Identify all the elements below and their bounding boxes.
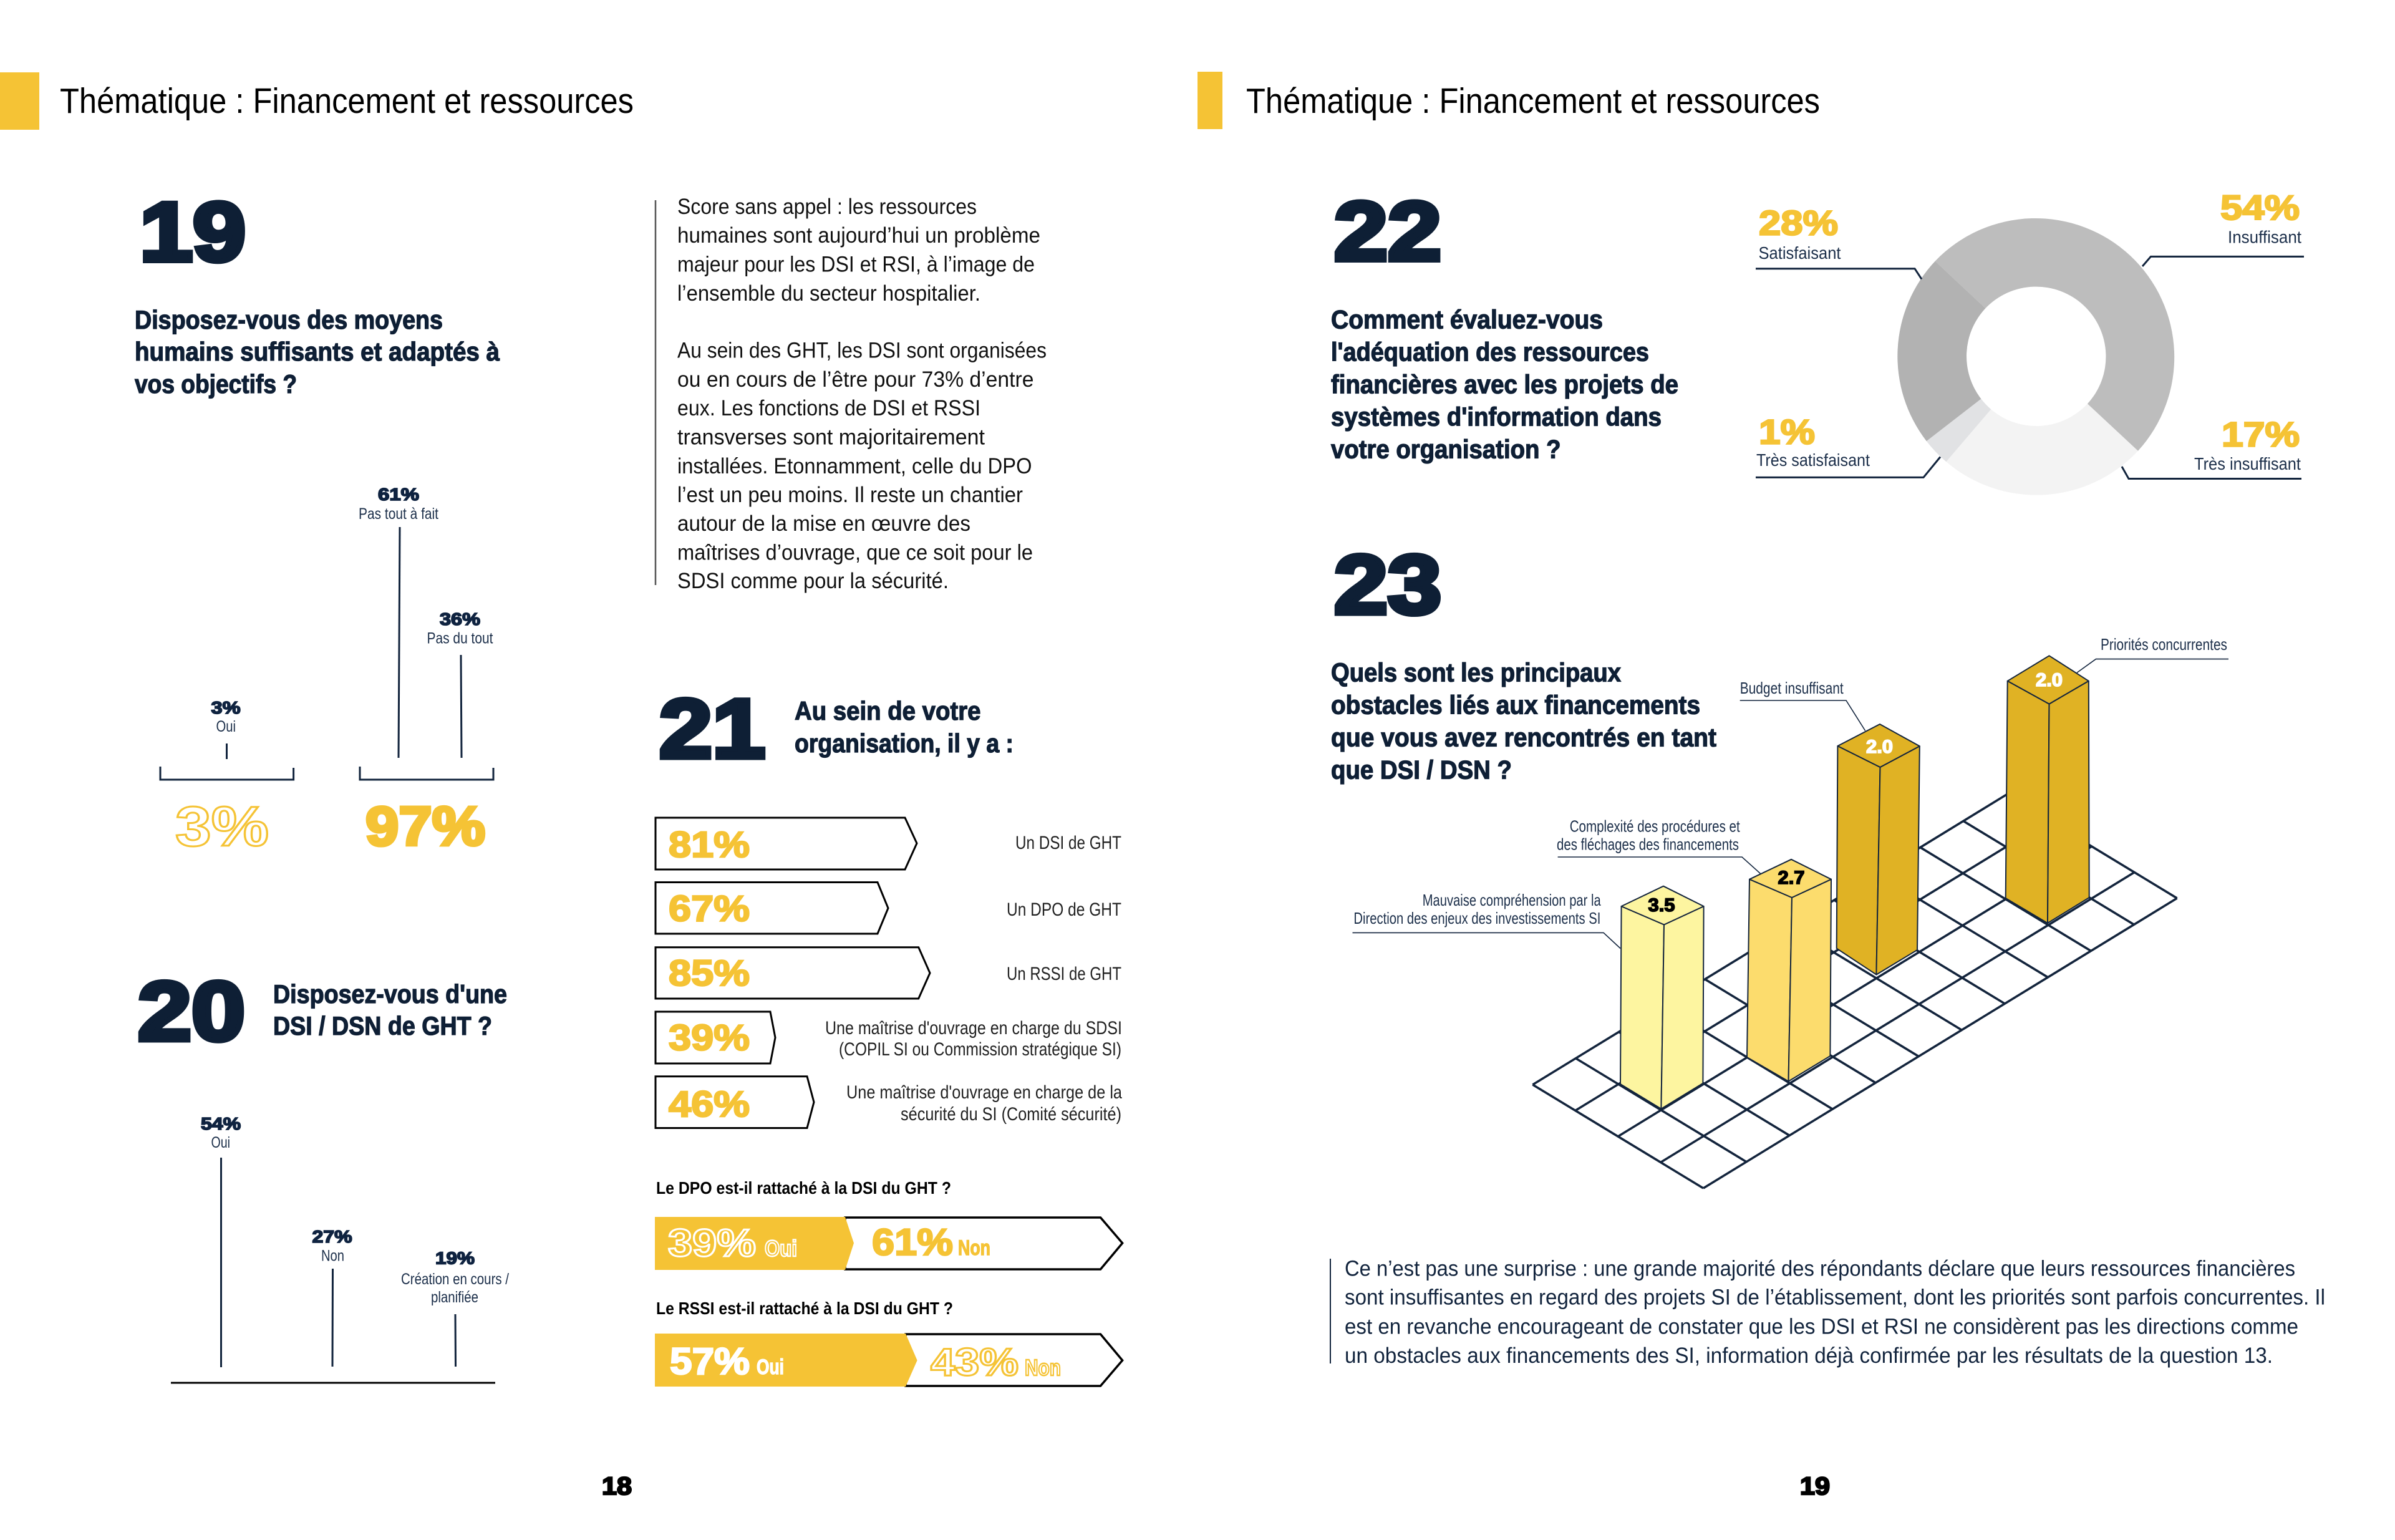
panel: question 19 (135, 186, 500, 858)
text block: commentary: installées. Etonnamment, celle du DPO (677, 454, 1032, 478)
question 21 heading: Au sein de votre (795, 696, 980, 725)
value: 3% oui: Oui (216, 718, 236, 735)
icon: yellow header tab (1198, 72, 1222, 129)
arrow row: 85% RSSI: 85% (669, 953, 750, 994)
callout: 17% très insuffisant (2122, 415, 2301, 479)
text block: commentary: Ce n’est pas une surprise : une grande majorité des répondants déclare que leurs ressources financières (1345, 1256, 2295, 1281)
question 22 heading: financières avec les projets de (1331, 369, 1678, 399)
arrow row: 67% DPO (656, 882, 1121, 934)
question 19 heading: humains suffisants et adaptés à (135, 337, 500, 366)
panel: page 18 (0, 72, 1123, 1500)
total 3%: 3% (175, 796, 269, 858)
question 20 heading (273, 979, 507, 1040)
question number 22: 22 (1334, 185, 1441, 278)
callout: 17% très insuffisant: Très insuffisant (2194, 454, 2301, 473)
callout: 28% satisfaisant: 28% (1759, 203, 1838, 242)
column: complexité des procédures 2.7: 2.7 (1778, 868, 1805, 888)
bracket: oui (160, 767, 294, 780)
text block: commentary: Au sein des GHT, les DSI sont organisées (677, 339, 1047, 363)
value: 19% création en cours: Création en cours / (401, 1271, 509, 1288)
value: 36% pas du tout: Pas du tout (427, 630, 493, 647)
text block: commentary: l’est un peu moins. Il reste un chantier (677, 483, 1023, 507)
value: 27% non (312, 1227, 352, 1367)
text block: commentary (1330, 1256, 2325, 1368)
panel: question 21 (655, 682, 1123, 1387)
question 23 heading (1331, 658, 1716, 785)
question 23 heading: obstacles liés aux financements (1331, 690, 1700, 720)
callout: 1% très satisfaisant: Très satisfaisant (1756, 450, 1870, 470)
title: Thématique : Financement et ressources (1246, 81, 1820, 121)
question number 20: 20 (138, 966, 245, 1058)
arrow row: 39% SDSI: 39% (669, 1018, 750, 1058)
value: 61% pas tout à fait: Pas tout à fait (359, 505, 438, 523)
value: 54% oui: Oui (211, 1134, 230, 1151)
question 20 heading: Disposez-vous d'une (273, 979, 507, 1009)
question 23 heading: que DSI / DSN ? (1331, 755, 1512, 785)
callout: 54% insuffisant: 54% (2220, 188, 2300, 227)
arrow row: 81% DSI (656, 818, 1121, 869)
chart: isometric floor grid (1532, 795, 2177, 1188)
panel: question 20 (138, 966, 509, 1383)
text block: commentary: eux. Les fonctions de DSI et RSSI (677, 396, 980, 420)
arrow row: 81% DSI: Un DSI de GHT (1015, 833, 1121, 853)
callout: 28% satisfaisant (1756, 203, 1922, 279)
column: mauvaise compréhension 3.5: Direction des enjeux des investissements SI (1353, 909, 1600, 927)
value: 27% non: Non (321, 1247, 344, 1265)
arrow row: 39% SDSI (656, 1012, 1122, 1063)
value: 3% oui (211, 698, 241, 759)
question number 23: 23 (1334, 539, 1441, 631)
column: priorités concurrentes 2.0: 2.0 (2036, 670, 2063, 690)
text block: commentary: est en revanche encourageant de constater que les DSI et RSI ne considèrent pas les directions comme (1345, 1315, 2298, 1339)
arrow row: 67% DPO: Un DPO de GHT (1007, 899, 1121, 920)
column: complexité des procédures 2.7: Complexité des procédures et (1570, 817, 1740, 836)
chart: question 20 lines (171, 1114, 509, 1383)
sub-question: DPO: 39% (668, 1222, 756, 1265)
question 22 heading: l'adéquation des ressources (1331, 337, 1649, 367)
column: mauvaise compréhension 3.5 (1352, 886, 1704, 1109)
question number 21: 21 (659, 682, 765, 776)
arrow row: 39% SDSI: (COPIL SI ou Commission stratégique SI) (839, 1039, 1121, 1060)
value: 61% pas tout à fait (359, 485, 438, 758)
arrow row: 85% RSSI: Un RSSI de GHT (1007, 964, 1121, 984)
header: page 18 (0, 72, 634, 130)
sub-question: RSSI: Non (1025, 1355, 1061, 1380)
callout: 28% satisfaisant: Satisfaisant (1759, 243, 1841, 263)
title: Thématique : Financement et ressources (60, 81, 634, 121)
text block: commentary: ou en cours de l’être pour 73% d’entre (677, 367, 1034, 392)
value: 19% création en cours (401, 1249, 509, 1367)
value: 19% création en cours: 19% (435, 1249, 475, 1268)
total 97%: 97% (365, 795, 485, 857)
panel: question 22 (1331, 185, 2304, 495)
column: priorités concurrentes 2.0 (2006, 635, 2228, 923)
sub-question: DPO: 61% (872, 1221, 953, 1263)
callout: 1% très satisfaisant (1756, 412, 1940, 477)
arrow row: 81% DSI: 81% (669, 825, 750, 865)
callout: 54% insuffisant (2142, 188, 2304, 266)
text block: commentary: transverses sont majoritairement (677, 425, 985, 449)
question 22 heading: votre organisation ? (1331, 435, 1560, 464)
sub-question: RSSI: Le RSSI est-il rattaché à la DSI du GHT ? (656, 1299, 953, 1318)
sub-question: RSSI (655, 1299, 1123, 1387)
question 22 heading: systèmes d'information dans (1331, 402, 1662, 432)
text block: commentary: SDSI comme pour la sécurité. (677, 569, 949, 593)
sub-question: DPO: Oui (765, 1236, 797, 1261)
page number 19: 19 (1800, 1473, 1830, 1500)
header: page 19 (1198, 72, 1820, 129)
text block: commentary (656, 195, 1047, 593)
arrow row: 67% DPO: 67% (669, 888, 750, 929)
callout: 17% très insuffisant: 17% (2222, 415, 2300, 454)
axis (171, 1382, 495, 1383)
panel: question 23 (1331, 539, 2228, 1188)
column: budget insuffisant 2.0 (1740, 679, 1920, 975)
arrow row: 46% sécurité (656, 1077, 1122, 1128)
panel: page 19 (1198, 72, 2325, 1500)
sub-question: RSSI: 43% (931, 1341, 1018, 1384)
question 19 heading: vos objectifs ? (135, 369, 297, 399)
question 23 heading: que vous avez rencontrés en tant (1331, 723, 1716, 752)
question 21 heading (795, 696, 1014, 758)
arrow row: 39% SDSI: Une maîtrise d'ouvrage en charge du SDSI (825, 1018, 1122, 1039)
column: mauvaise compréhension 3.5: Mauvaise compréhension par la (1423, 891, 1601, 909)
column: budget insuffisant 2.0: 2.0 (1866, 737, 1893, 757)
text block: commentary: Score sans appel : les ressources (677, 195, 977, 219)
sub-question: DPO: Non (958, 1236, 990, 1260)
arrow row: 46% sécurité: 46% (669, 1084, 750, 1125)
text block: commentary: maîtrises d’ouvrage, que ce soit pour le (677, 541, 1033, 565)
value: 36% pas du tout (427, 609, 493, 758)
value: 36% pas du tout: 36% (440, 609, 480, 629)
arrow row: 46% sécurité: Une maîtrise d'ouvrage en charge de la (846, 1082, 1122, 1103)
column: priorités concurrentes 2.0: Priorités concurrentes (2101, 635, 2227, 654)
text block: commentary: humaines sont aujourd’hui un problème (677, 223, 1040, 248)
arrow row: 85% RSSI (656, 947, 1121, 999)
value: 61% pas tout à fait: 61% (378, 485, 419, 504)
icon: yellow header block (0, 72, 39, 130)
bracket: non (360, 767, 493, 780)
value: 3% oui: 3% (211, 698, 241, 717)
column: complexité des procédures 2.7 (1557, 817, 1831, 1082)
sub-question: DPO: Le DPO est-il rattaché à la DSI du GHT ? (656, 1178, 951, 1198)
question 21 heading: organisation, il y a : (795, 729, 1014, 758)
text block: commentary: un obstacles aux financements des SI, information déjà confirmée par les résultats de la question 13. (1345, 1344, 2273, 1368)
callout: 1% très satisfaisant: 1% (1759, 412, 1815, 452)
question 23 heading: Quels sont les principaux (1331, 658, 1622, 687)
chart: question 19 lines (160, 485, 493, 858)
sub-question: RSSI: 57% (670, 1340, 750, 1382)
page number 18: 18 (602, 1473, 632, 1500)
text block: commentary: l’ensemble du secteur hospitalier. (677, 281, 980, 306)
question 20 heading: DSI / DSN de GHT ? (273, 1011, 492, 1040)
callout: 54% insuffisant: Insuffisant (2228, 228, 2301, 247)
question 22 heading: Comment évaluez-vous (1331, 304, 1603, 334)
column: mauvaise compréhension 3.5: 3.5 (1648, 895, 1675, 916)
question number 19: 19 (140, 186, 246, 279)
value: 54% oui (201, 1114, 241, 1367)
question 19 heading: Disposez-vous des moyens (135, 305, 443, 334)
text block: commentary: sont insuffisantes en regard des projets SI de l’établissement, dont les priorités sont parfois concurrentes. Il (1345, 1285, 2325, 1310)
value: 27% non: 27% (312, 1227, 352, 1246)
column: complexité des procédures 2.7: des fléchages des financements (1557, 835, 1739, 853)
column: budget insuffisant 2.0: Budget insuffisant (1740, 679, 1844, 697)
arrow row: 46% sécurité: sécurité du SI (Comité sécurité) (901, 1104, 1121, 1125)
text block: commentary: autour de la mise en œuvre des (677, 511, 970, 536)
question 19 heading (135, 305, 500, 399)
text block: commentary: majeur pour les DSI et RSI, à l’image de (677, 252, 1035, 277)
sub-question: DPO (655, 1178, 1123, 1270)
value: 19% création en cours: planifiée (431, 1289, 478, 1306)
chart: donut (1897, 218, 2174, 495)
sub-question: RSSI: Oui (757, 1355, 784, 1379)
value: 54% oui: 54% (201, 1114, 241, 1133)
question 22 heading (1331, 304, 1678, 464)
